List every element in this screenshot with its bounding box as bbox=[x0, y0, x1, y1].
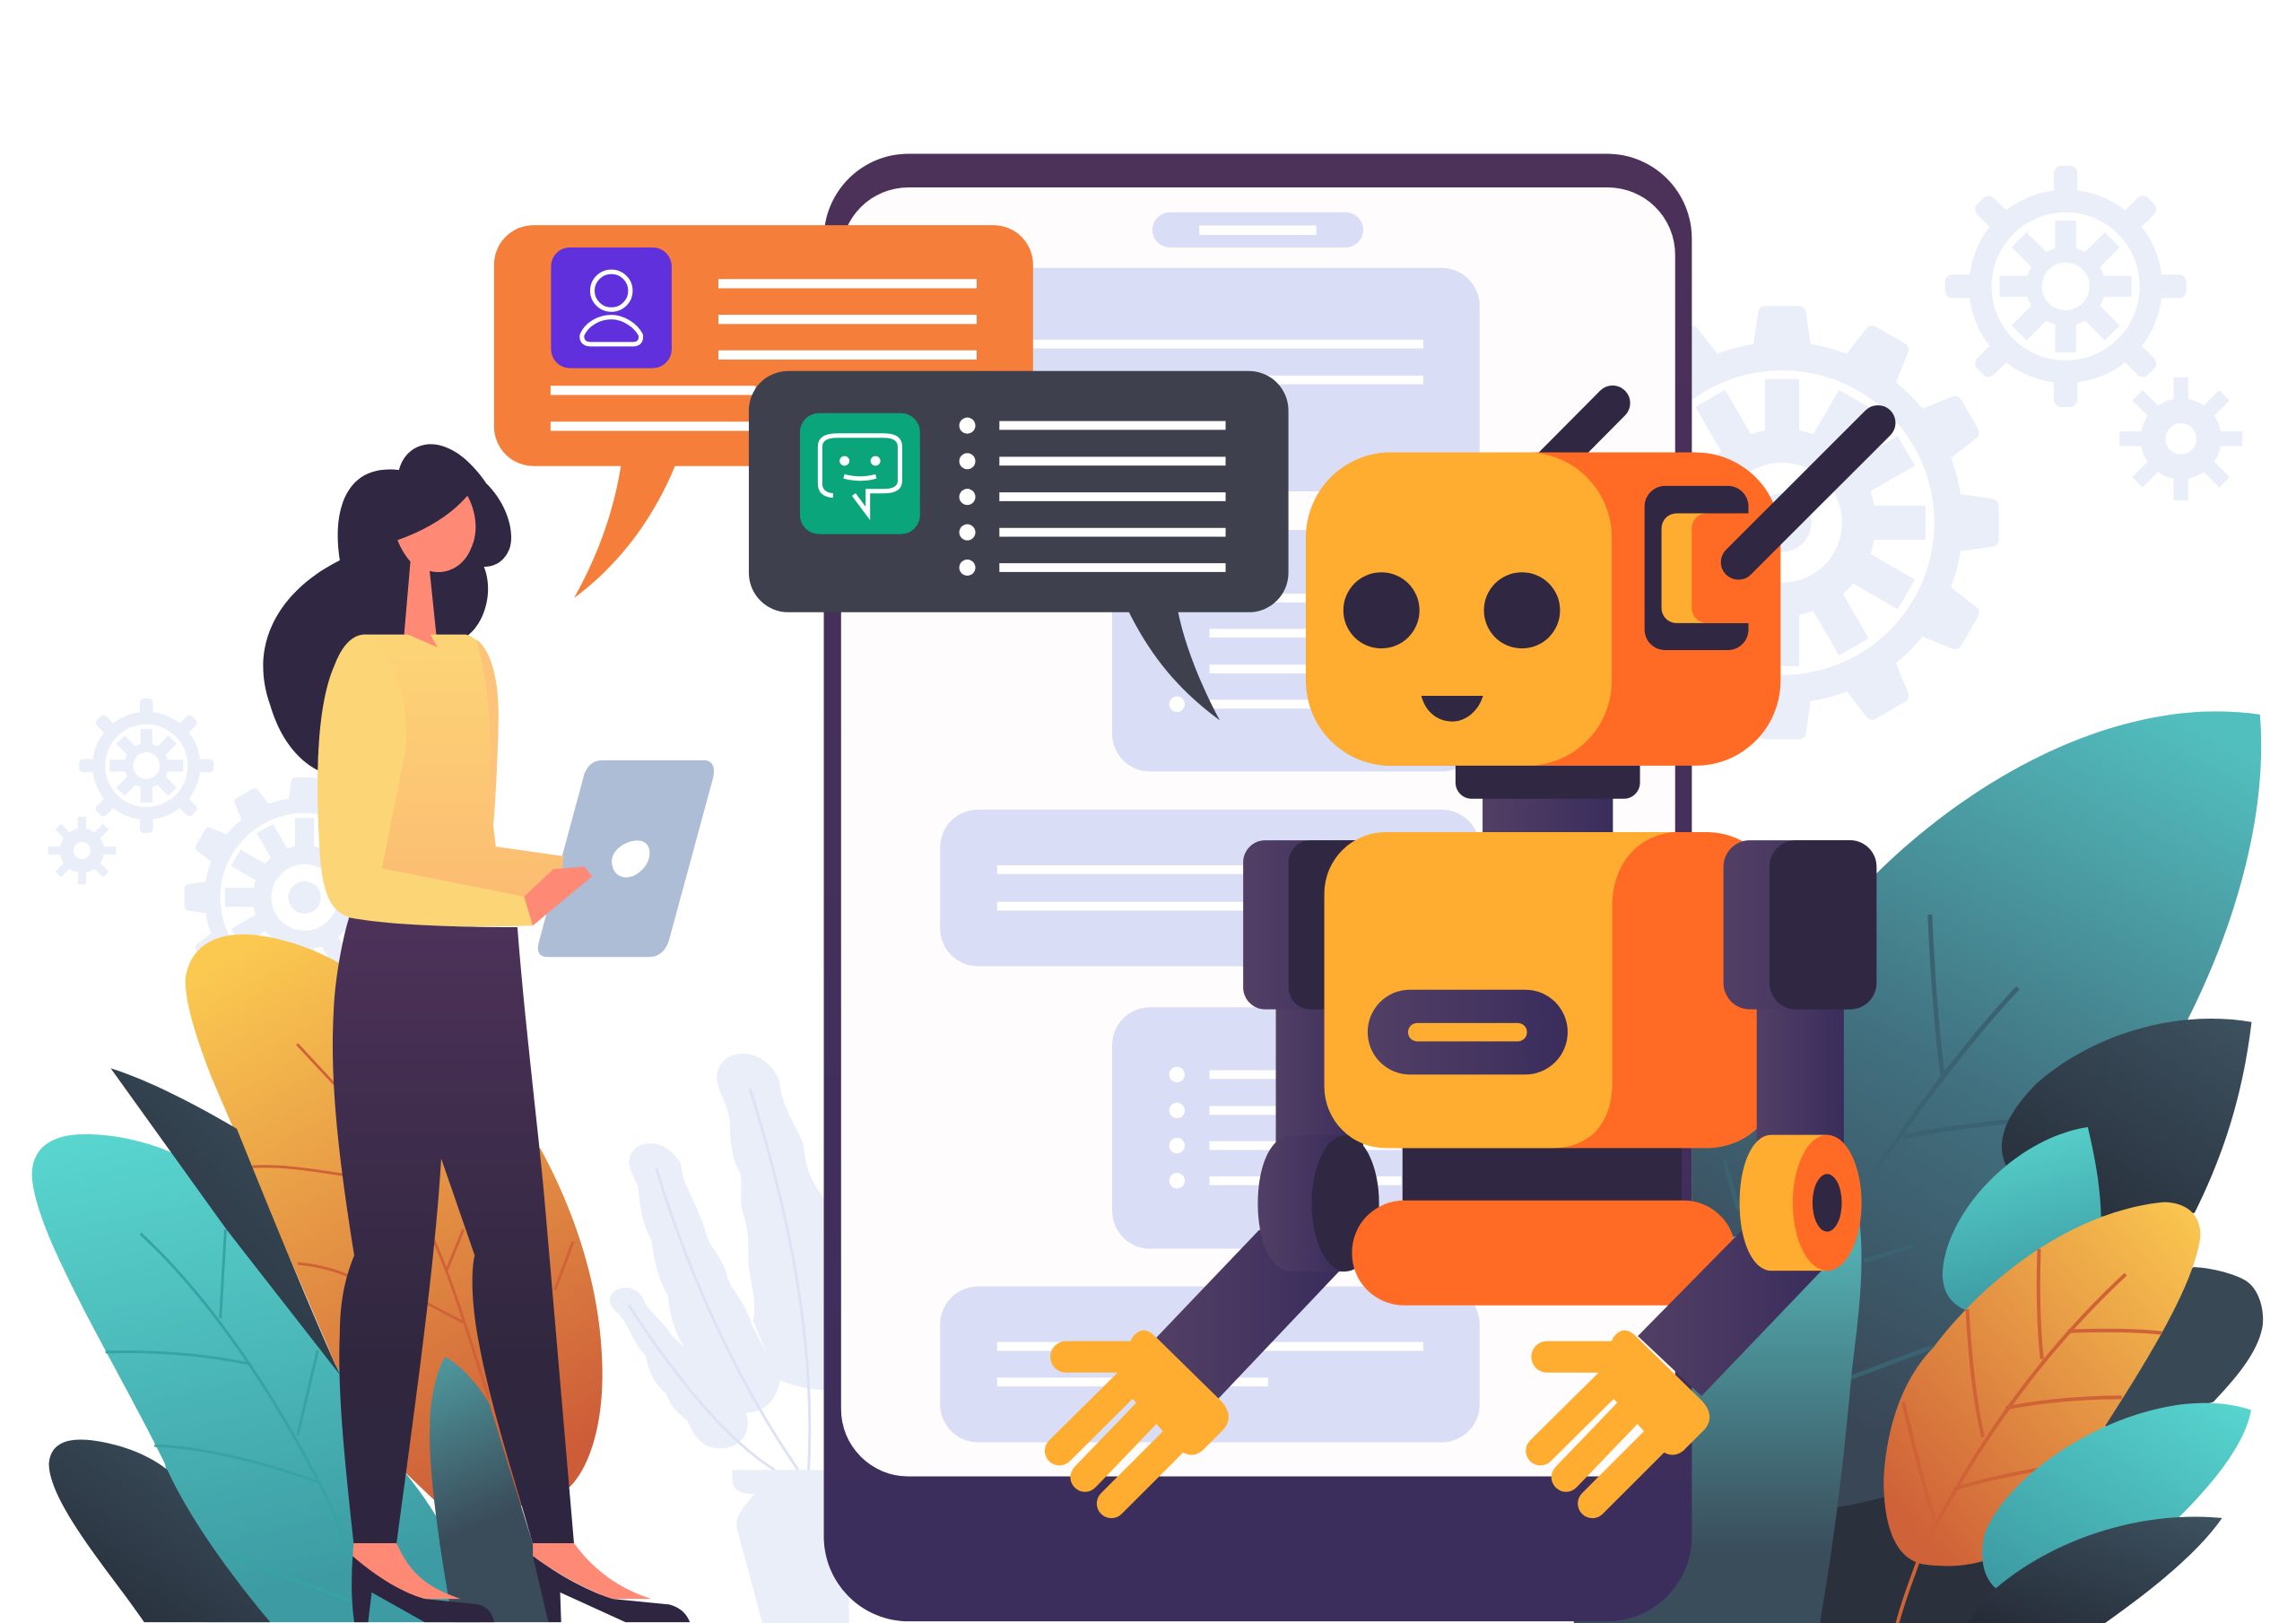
foliage: front leaves on the right bbox=[1883, 1019, 2263, 1623]
hips bbox=[1352, 1201, 1735, 1306]
message card 1 bbox=[937, 268, 1480, 491]
eyes bbox=[1344, 572, 1420, 648]
pale potted plant bbox=[610, 1054, 849, 1623]
teal leaf veins bbox=[106, 1229, 350, 1601]
big leaf veins bbox=[1724, 915, 2018, 1378]
phone screen bbox=[841, 187, 1675, 1477]
sweater bbox=[317, 633, 564, 926]
robot head bbox=[1306, 453, 1780, 766]
hair bbox=[263, 444, 511, 778]
mouth bbox=[1422, 696, 1483, 722]
orange speech bubble bbox=[494, 225, 1033, 598]
foliage: large teal and dark leaves on the right, back layer bbox=[1574, 711, 2261, 1623]
orange leaf stem bbox=[1898, 1561, 1918, 1623]
right upper arm bbox=[1757, 995, 1844, 1164]
gear: left tiny bbox=[48, 817, 116, 884]
left shoulder bbox=[1243, 840, 1377, 1010]
bubble body and tail bbox=[749, 371, 1289, 720]
message card 4 bbox=[1112, 1007, 1480, 1249]
orange leaf bbox=[186, 934, 603, 1528]
neck bbox=[1456, 766, 1640, 835]
orange leaf bbox=[1883, 1202, 2200, 1566]
bullet list bbox=[960, 418, 1226, 576]
speaker pill bbox=[1152, 213, 1363, 247]
tablet bbox=[538, 760, 714, 957]
gear: small right bbox=[2119, 378, 2242, 500]
message card 2 bbox=[1112, 530, 1480, 771]
text lines bbox=[551, 279, 977, 431]
right forearm bbox=[1638, 1231, 1822, 1396]
chest slot bbox=[1368, 990, 1568, 1074]
dark leaf right bbox=[2105, 1267, 2263, 1429]
foliage: left cluster bbox=[32, 934, 603, 1622]
pants bbox=[333, 917, 574, 1544]
orange leaf veins bbox=[1903, 1249, 2162, 1549]
gear: left small bbox=[79, 699, 213, 833]
left elbow joint bbox=[1257, 1135, 1379, 1271]
icon: user avatar bbox=[551, 247, 672, 369]
gear: top right bbox=[1945, 166, 2187, 407]
phone body bbox=[824, 153, 1692, 1621]
dark speech bubble bbox=[749, 371, 1289, 720]
right shoulder bbox=[1724, 840, 1876, 1010]
dark leaf upper bbox=[110, 1068, 340, 1375]
waist bbox=[1403, 1141, 1682, 1206]
ear bbox=[1645, 486, 1752, 650]
small front leaf bbox=[430, 1357, 548, 1622]
antenna back bbox=[1523, 403, 1613, 493]
icon: chat robot face bbox=[800, 413, 920, 534]
gear: left medium bbox=[185, 777, 424, 1018]
teal leaf bbox=[32, 1134, 479, 1622]
left forearm bbox=[1156, 1229, 1339, 1399]
dark base leaf bbox=[1820, 1426, 2125, 1623]
left upper arm bbox=[1276, 995, 1363, 1164]
dark leaf upper bbox=[2002, 1019, 2251, 1216]
left foot bbox=[352, 1543, 494, 1622]
background gears right bbox=[1565, 166, 2242, 740]
right foot bbox=[533, 1543, 690, 1622]
message card 5 bbox=[940, 1287, 1480, 1443]
right hand bbox=[1541, 1331, 1709, 1504]
dark leaf bottom bbox=[1967, 1516, 2222, 1623]
woman bbox=[263, 444, 714, 1622]
dark leaf lower bbox=[49, 1440, 270, 1622]
gear: large right bbox=[1565, 306, 1999, 740]
robot torso bbox=[1325, 832, 1780, 1148]
lower teal leaf bbox=[1574, 1204, 1862, 1623]
message card 3 bbox=[940, 810, 1480, 967]
orange leaf veins bbox=[252, 1044, 573, 1399]
background gears left bbox=[48, 699, 424, 1018]
teal leaf bottom bbox=[1982, 1403, 2251, 1603]
robot bbox=[1059, 403, 1878, 1504]
hand bbox=[524, 867, 592, 925]
left hand bbox=[1059, 1331, 1229, 1504]
big teal leaf bbox=[1692, 711, 2261, 1507]
bubble body and tail bbox=[494, 225, 1033, 598]
teal leaf small bbox=[1943, 1127, 2101, 1311]
neck and face bbox=[397, 496, 475, 647]
right wrist joint bbox=[1740, 1135, 1862, 1271]
antenna front bbox=[1738, 423, 1878, 562]
phone bbox=[824, 153, 1692, 1621]
